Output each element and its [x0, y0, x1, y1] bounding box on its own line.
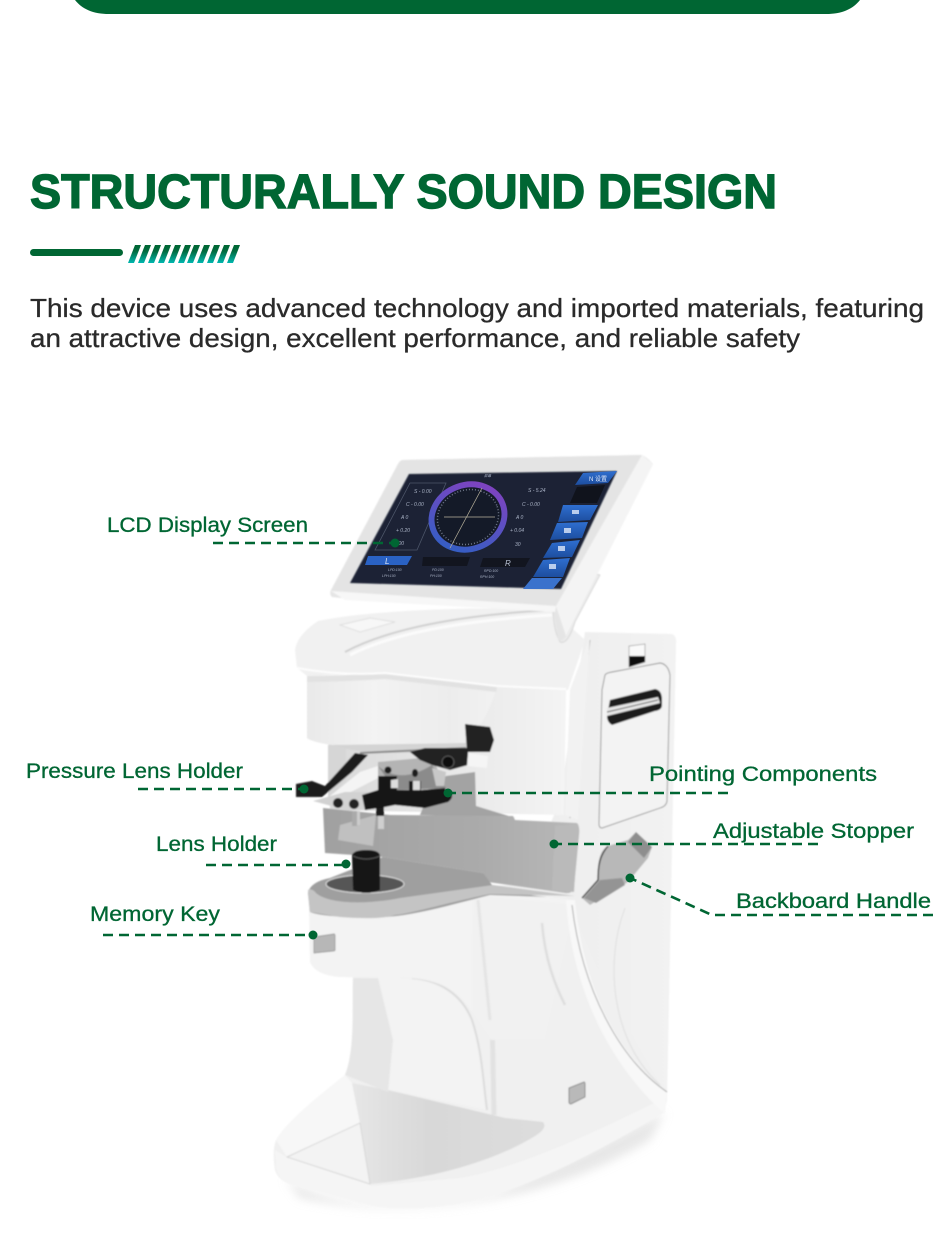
callout: memory key: Memory Key [90, 903, 221, 926]
device illustration [274, 455, 676, 1208]
knob cluster [410, 748, 468, 770]
callout: adjustable stopper: Adjustable Stopper [713, 820, 914, 843]
screen readouts: RPD:100 [484, 569, 498, 573]
foot left top [276, 1075, 360, 1157]
screen readouts: S - 5.24 [528, 488, 546, 494]
lens disc [326, 875, 404, 893]
head bowl [307, 673, 497, 747]
top banner bar [75, 0, 860, 14]
screen readouts: 30 [515, 542, 521, 548]
screen readouts: RPH:100 [480, 575, 494, 579]
door arc panel [566, 900, 667, 1114]
screen readouts: C - 0.00 [406, 502, 424, 508]
printer slot [607, 689, 662, 725]
intro paragraph [30, 293, 924, 353]
title: STRUCTURALLY SOUND DESIGN [30, 166, 777, 219]
screen readouts: LPD:100 [388, 568, 402, 572]
knob [352, 850, 380, 893]
side button [569, 1082, 585, 1104]
gauge ring [422, 474, 514, 560]
rear column and door [480, 632, 676, 1150]
recess behind mechanism [328, 686, 566, 815]
LCD screen [350, 471, 617, 589]
callout: pointing components: Pointing Components [649, 763, 877, 786]
callout: lens holder: Lens Holder [156, 833, 277, 856]
screen readouts [382, 474, 546, 579]
memory key [314, 934, 335, 953]
printer tab [629, 644, 645, 667]
column front [378, 977, 487, 1110]
LCD screen: N 设置 [589, 475, 607, 483]
screen readouts: A 0 [515, 515, 524, 521]
LCD screen: L [385, 557, 389, 566]
head right shoulder [565, 636, 590, 820]
main body and foot [274, 880, 665, 1208]
lens table [308, 857, 547, 917]
decorative title underline [30, 245, 240, 263]
callout: LCD display screen [107, 514, 400, 548]
mechanism rail [332, 743, 476, 753]
gray slider [323, 808, 579, 893]
knob block [465, 724, 494, 752]
lens holder arm [296, 753, 368, 797]
left and right tabs [365, 556, 412, 565]
silver plate [313, 792, 368, 811]
printer door [599, 663, 670, 828]
right handle [582, 832, 652, 905]
screen side buttons [575, 471, 617, 485]
callout: backboard handle: Backboard Handle [736, 890, 931, 913]
silver mount [378, 757, 446, 792]
screen readouts: A 0 [400, 515, 409, 521]
screen readouts: LPH:100 [382, 574, 396, 578]
screen readouts: + 0.20 [396, 528, 410, 534]
callout: memory key [90, 903, 318, 940]
screen readouts: 屏幕 [484, 474, 492, 478]
foot lower lip [275, 1100, 665, 1208]
black mechanism cluster [362, 790, 452, 810]
screen readouts: S - 0.00 [414, 489, 432, 495]
callout: lens holder [156, 833, 350, 868]
screen hinge [553, 570, 600, 642]
screen readouts: C - 0.00 [522, 502, 540, 508]
callout: LCD display screen: LCD Display Screen [107, 514, 308, 537]
intro paragraph: This device uses advanced technology and imported materials, featuring [30, 293, 924, 323]
screen bezel [330, 455, 653, 640]
callout: pointing components [444, 763, 877, 798]
foot tray shadow [352, 1083, 544, 1184]
base shadow [285, 1112, 665, 1208]
head lid [295, 608, 585, 690]
callout: pressure lens holder: Pressure Lens Holder [26, 760, 243, 783]
screen readouts: PH:100 [430, 574, 442, 578]
foot tray left plate [287, 1123, 370, 1184]
callout: adjustable stopper [550, 820, 914, 848]
LCD screen: R [505, 559, 511, 568]
intro paragraph: an attractive design, excellent performance, and reliable safety [30, 323, 800, 353]
table lower housing [309, 890, 572, 1012]
column edge line [570, 640, 590, 818]
screen readouts: + 0.04 [510, 528, 524, 534]
callout: pressure lens holder [26, 760, 308, 794]
screen readouts: PD:100 [432, 568, 444, 572]
left reading box [375, 483, 446, 550]
callout: backboard handle [626, 874, 933, 915]
screen readouts: + 0.00 [390, 541, 404, 547]
